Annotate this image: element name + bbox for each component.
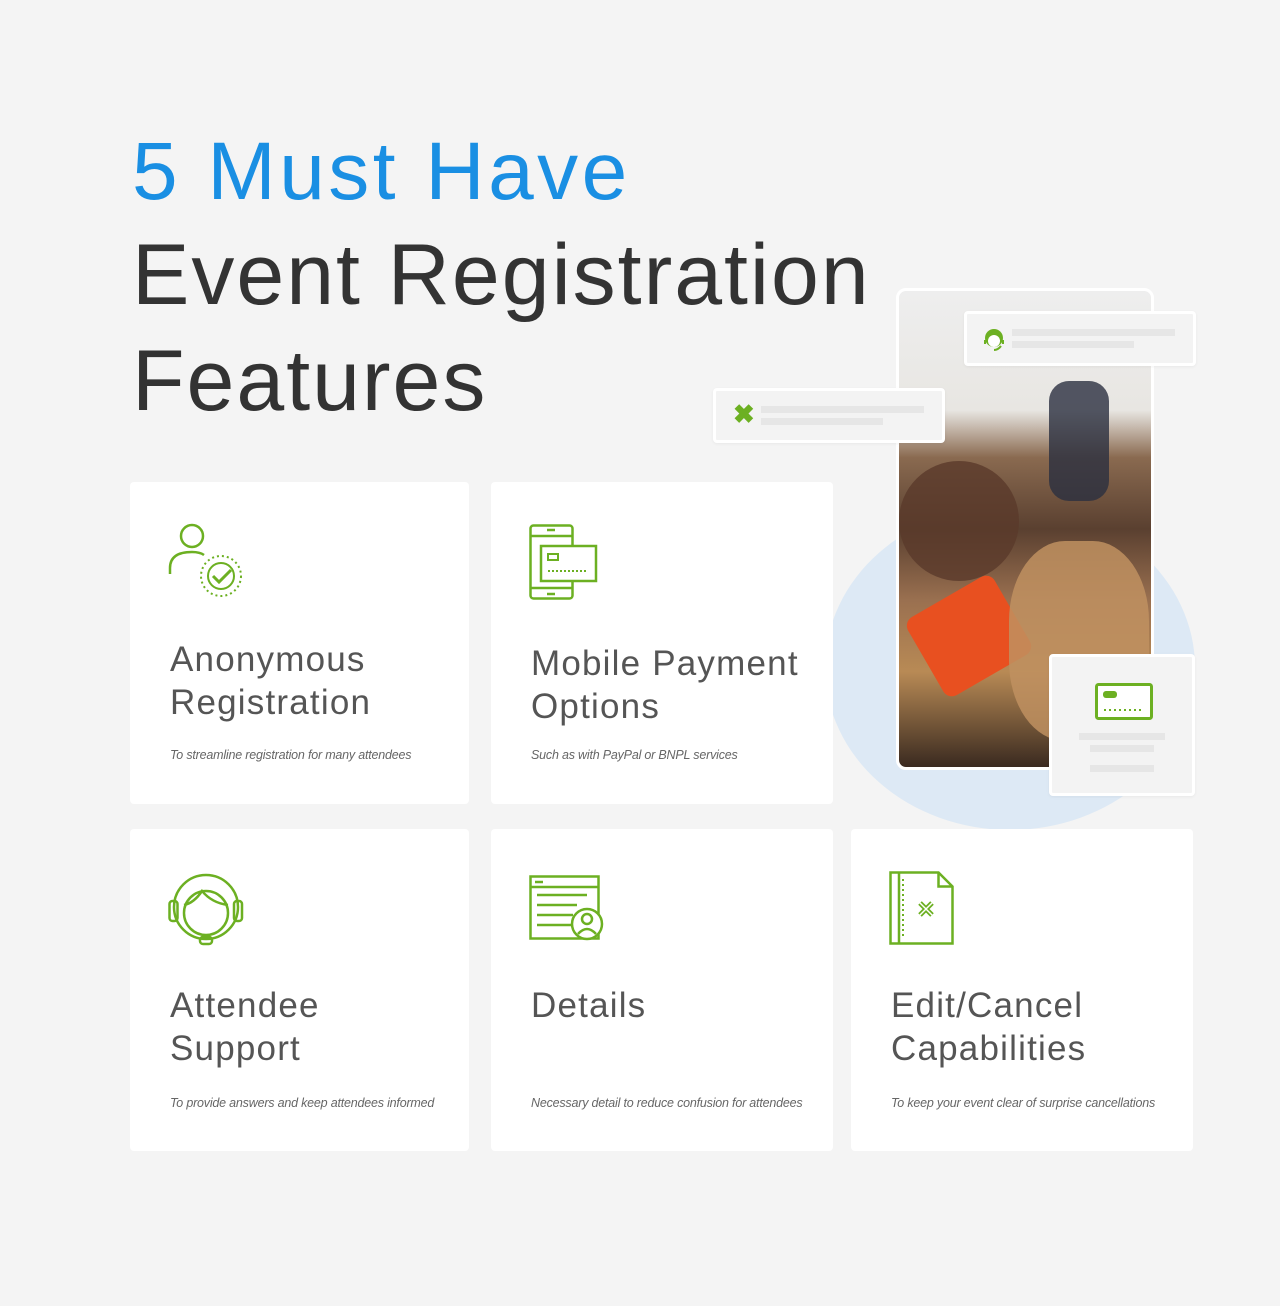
icon: headset agent <box>168 874 244 946</box>
card: attendee support <box>130 829 469 1151</box>
title <box>132 126 871 429</box>
widget: payment card <box>1049 654 1195 796</box>
card: edit cancel <box>851 829 1193 1151</box>
icon: card <box>1095 683 1153 720</box>
card: mobile payment <box>491 482 833 804</box>
card: mobile payment: Such as with PayPal or BNPL services <box>531 748 738 762</box>
icon: cancel document <box>889 871 954 945</box>
title: Features <box>132 333 487 429</box>
card: details <box>491 829 833 1151</box>
card: anonymous registration: To streamline registration for many attendees <box>170 748 411 762</box>
title: 5 Must Have <box>132 126 631 217</box>
card: attendee support: Attendee <box>170 986 320 1025</box>
card: edit cancel: Capabilities <box>891 1029 1086 1068</box>
card: details: Necessary detail to reduce confusion for attendees <box>531 1096 802 1110</box>
icon: user check <box>168 524 242 597</box>
card: anonymous registration: Anonymous <box>170 640 366 679</box>
title: Event Registration <box>132 227 871 323</box>
icon: support agent <box>984 329 1004 351</box>
card: attendee support: Support <box>170 1029 301 1068</box>
card: mobile payment: Mobile Payment <box>531 644 799 683</box>
card: anonymous registration <box>130 482 469 804</box>
icon: x: ✖ <box>733 399 755 429</box>
card: edit cancel: Edit/Cancel <box>891 986 1083 1025</box>
card: attendee support: To provide answers and keep attendees informed <box>170 1096 434 1110</box>
notification: cancel <box>713 388 945 443</box>
card: mobile payment: Options <box>531 687 660 726</box>
phone photo <box>896 288 1154 770</box>
notification: support <box>964 311 1196 366</box>
card: edit cancel: To keep your event clear of surprise cancellations <box>891 1096 1155 1110</box>
icon: details window <box>529 875 604 940</box>
icon: phone card <box>529 524 598 600</box>
card: anonymous registration: Registration <box>170 683 371 722</box>
decorative blob <box>825 505 1195 830</box>
card: details: Details <box>531 986 646 1025</box>
